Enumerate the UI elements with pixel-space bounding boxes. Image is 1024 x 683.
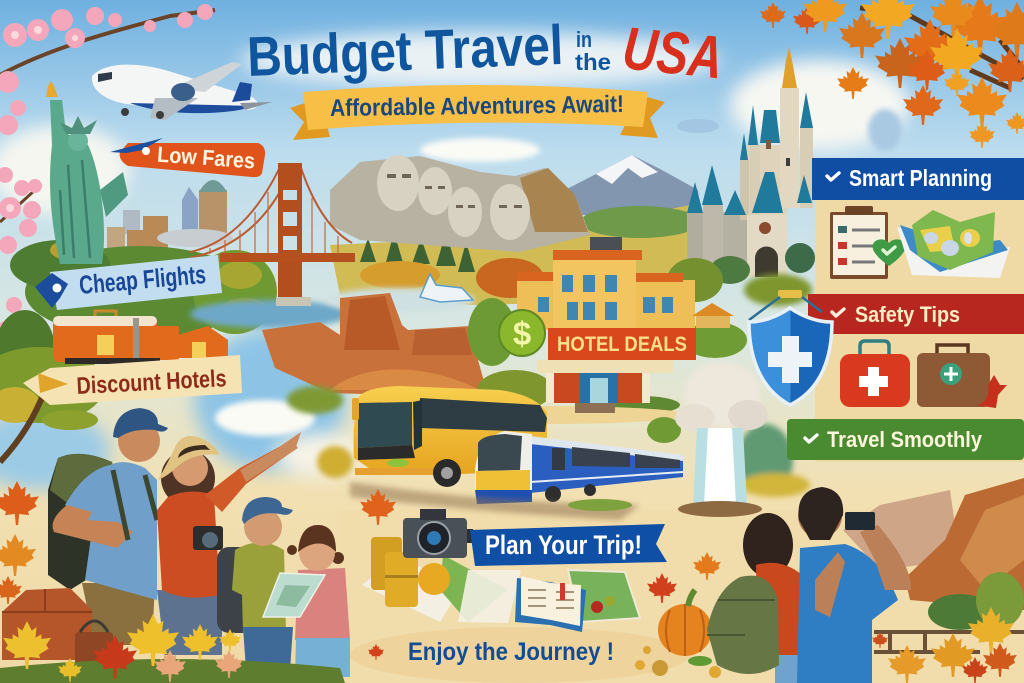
Enjoy the Journey text: Enjoy the Journey !: [408, 638, 614, 666]
open guide book and plate map: [515, 570, 640, 632]
travel planning items: [362, 537, 521, 623]
yellow-green hills: [330, 205, 700, 305]
couple with backpack and phone: [707, 487, 911, 683]
Discount Hotels label: Discount Hotels: [76, 365, 227, 400]
Smart Planning banner: [812, 158, 1024, 200]
family: mother: [157, 432, 301, 655]
Low Fares tag: [110, 138, 265, 177]
family: father: [48, 408, 168, 645]
tagline ribbon: [290, 85, 665, 140]
title: USA: [620, 14, 726, 91]
small boat: [420, 274, 473, 302]
green foliage behind labels: [0, 240, 277, 462]
autumn leaves bottom left and grass: [0, 481, 396, 683]
cherry blossom branch and top left flowers: [0, 4, 215, 365]
icon: blue shield: [749, 290, 832, 405]
castle: [687, 47, 815, 284]
family: son: [217, 497, 293, 670]
icon: camera: [403, 509, 473, 558]
Mount Rushmore: [330, 155, 590, 252]
title: Budget Travel: [246, 13, 564, 88]
orange luggage: [2, 588, 113, 670]
folded map held by children: [263, 573, 325, 617]
icon: map: [897, 210, 1010, 278]
city skyline: [107, 180, 233, 255]
icon: dollar coin: [499, 310, 545, 356]
Statue of Liberty: [46, 81, 128, 264]
icon: orange suitcases: [53, 311, 228, 364]
tagline ribbon: Affordable Adventures Await!: [330, 91, 624, 122]
Low Fares tag: Low Fares: [156, 142, 256, 173]
blue clouds: [677, 109, 902, 151]
hotel deals sign: [548, 328, 696, 360]
Cheap Flights label: [35, 255, 222, 310]
icon: dollar coin: $: [513, 315, 531, 352]
autumn tree top right: [760, 0, 1024, 148]
panel: right information panel: [787, 158, 1024, 462]
red rock canyon: [262, 288, 487, 414]
title: the: [575, 49, 611, 75]
airplane: [92, 62, 272, 120]
icon: first aid kit: [840, 341, 910, 407]
hotel deals sign: HOTEL DEALS: [557, 333, 687, 356]
icon: clipboard checklist: [830, 206, 905, 279]
bus: [352, 386, 547, 487]
family: daughter: [287, 525, 350, 677]
right canyon scene: [843, 478, 1024, 652]
icon: pumpkin and fallen leaves: [635, 552, 721, 678]
geyser: [675, 362, 768, 517]
Plan Your Trip label: Plan Your Trip!: [485, 530, 642, 560]
foliage around hotel: [390, 258, 747, 424]
title: in: [576, 27, 592, 52]
snowy mountains: [565, 155, 700, 215]
hotel building: [517, 237, 734, 413]
Smart Planning banner: Smart Planning: [849, 165, 992, 191]
green bank around geyser: [737, 274, 812, 497]
train: [475, 431, 683, 504]
Plan Your Trip label: [470, 524, 667, 566]
Safety Tips banner: Safety Tips: [855, 302, 960, 327]
Safety Tips banner: [808, 294, 1024, 334]
icon: brown travel case: [917, 345, 1007, 408]
Cheap Flights label: Cheap Flights: [78, 259, 207, 300]
Travel Smoothly banner: [787, 419, 1024, 460]
road and planted ground: [317, 417, 681, 520]
Golden Gate Bridge: [190, 163, 355, 328]
Travel Smoothly banner: Travel Smoothly: [827, 427, 983, 452]
autumn leaves bottom right: [872, 607, 1017, 683]
Discount Hotels label: [23, 355, 242, 405]
